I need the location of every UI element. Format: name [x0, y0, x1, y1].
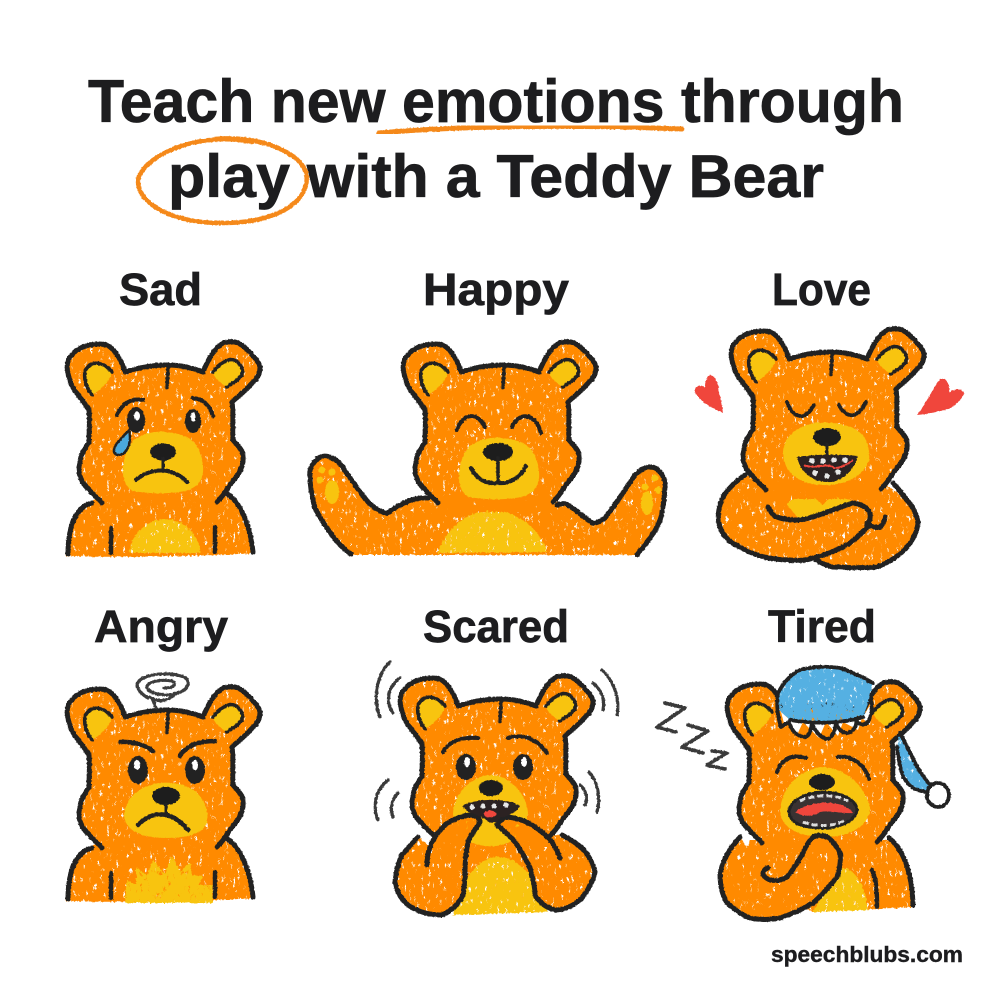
bear: sad: [66, 342, 260, 557]
heading: Tired: Tired: [768, 601, 876, 652]
bear: love: [695, 329, 964, 568]
bear: scared: [375, 662, 618, 915]
icon: angry scribble: [137, 674, 188, 708]
heading: Angry: Angry: [94, 601, 228, 652]
title: [88, 68, 904, 223]
heading: Sad: Sad: [119, 264, 202, 315]
crossed arms: [718, 475, 918, 568]
icon: nightcap: [777, 667, 949, 807]
heading: Happy: Happy: [423, 264, 569, 315]
body and outstretched arms: [310, 456, 665, 555]
icon: heart left: [695, 375, 723, 413]
footer: website: speechblubs.com: [771, 942, 963, 967]
face: [777, 757, 869, 828]
arm on chin: [720, 836, 840, 920]
heading: Love: Love: [772, 264, 871, 315]
bear: angry: [66, 674, 260, 903]
hands over mouth: [395, 815, 595, 915]
heading: Scared: Scared: [423, 601, 569, 652]
title: play with a Teddy Bear: [168, 143, 824, 210]
bear: happy: [310, 342, 665, 555]
icon: trembling lines: [375, 662, 618, 820]
icon: sleep Zzz: [657, 703, 727, 769]
bear: tired: [657, 667, 949, 920]
icon: heart right: [917, 379, 964, 415]
title: Teach new emotions through: [88, 68, 904, 135]
